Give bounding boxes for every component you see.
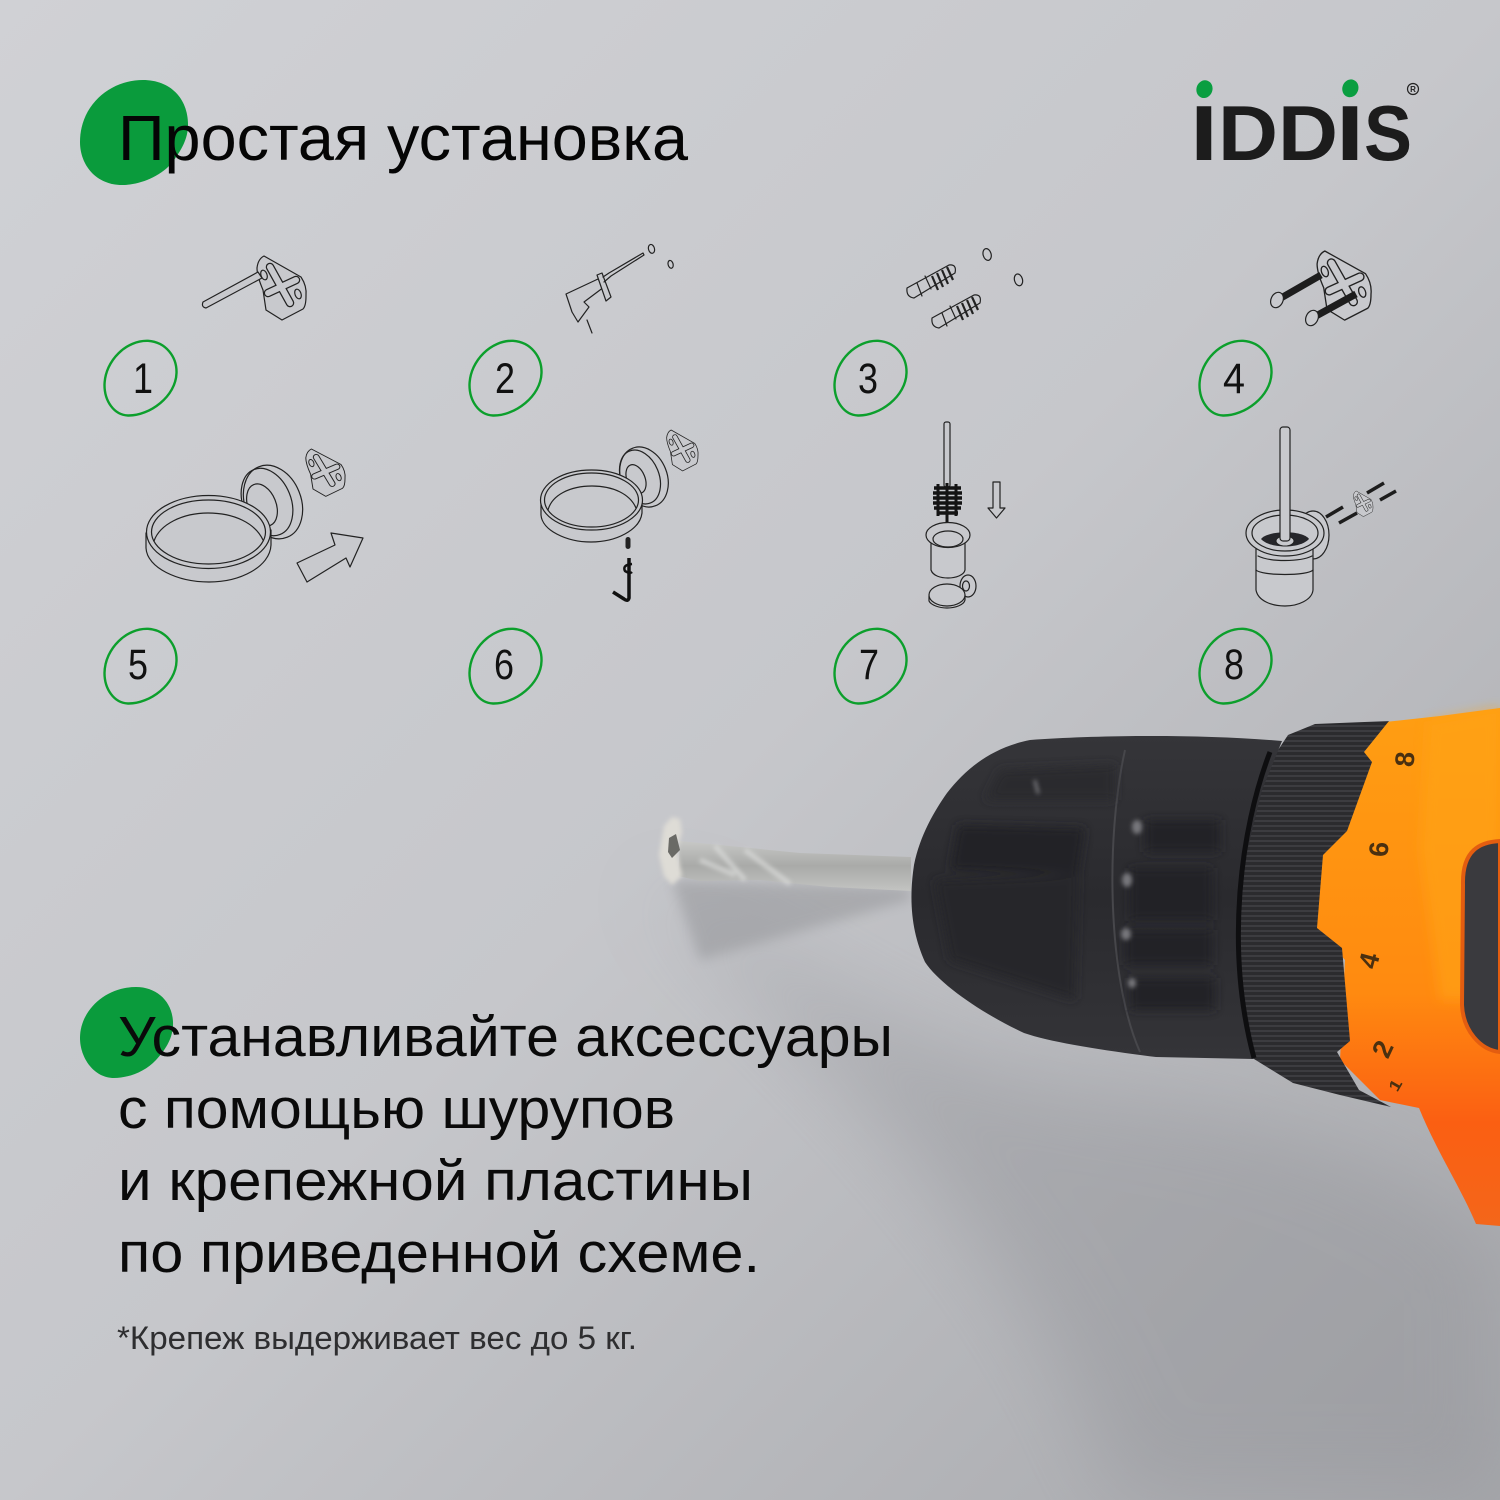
bit shaft	[678, 841, 911, 891]
icon: wall anchors and holes	[907, 248, 1024, 328]
badge 4	[1200, 341, 1272, 416]
badge 5	[104, 629, 177, 704]
title: Простая установка	[118, 102, 688, 174]
registered mark: R	[1410, 85, 1416, 94]
badge 8: 8	[1224, 641, 1244, 689]
bit flutes	[700, 846, 790, 884]
badge 7	[834, 629, 907, 704]
logo letters: D	[1218, 89, 1278, 177]
icon: drill marking holes	[566, 244, 674, 333]
icon: ring fixed with hex key	[540, 430, 698, 600]
main paragraph: и крепежной пластины	[118, 1149, 753, 1213]
logo letters: D	[1278, 89, 1338, 177]
step 6	[470, 430, 698, 704]
step 3	[834, 248, 1024, 416]
main paragraph: по приведенной схеме.	[118, 1221, 760, 1285]
badge 3: 3	[858, 355, 878, 403]
knurled collar	[1235, 721, 1391, 1107]
footnote: *Крепеж выдерживает вес до 5 кг.	[117, 1320, 637, 1356]
dial numbers: 1	[1385, 1076, 1406, 1095]
dial numbers: 8	[1389, 750, 1421, 768]
dial numbers: 6	[1363, 840, 1395, 858]
icon: assembled brush holder with fixings	[1246, 427, 1396, 606]
badge 3	[834, 341, 907, 416]
chuck ribs	[935, 765, 1220, 1010]
dark window	[1462, 841, 1500, 1052]
step 8	[1200, 427, 1396, 704]
badge 1	[104, 341, 177, 416]
badge 2: 2	[495, 355, 515, 403]
collar gap	[1238, 752, 1270, 1058]
logo letters: S	[1364, 89, 1412, 177]
logo letters	[1190, 89, 1412, 177]
drill hole debris	[659, 817, 682, 885]
orange body	[1310, 708, 1500, 1226]
logo letters: I	[1336, 89, 1364, 177]
drill bit in wall	[659, 817, 911, 960]
dial numbers: 4	[1353, 950, 1386, 972]
dial numbers	[1353, 750, 1421, 1095]
main paragraph: с помощью шурупов	[118, 1077, 675, 1141]
badge 6	[470, 629, 542, 704]
green blob behind title	[80, 80, 188, 185]
step 5	[104, 449, 363, 704]
chuck seam	[1112, 750, 1140, 1052]
badge 6: 6	[494, 641, 514, 689]
logo: IDDIS	[1190, 77, 1418, 177]
dial numbers: 2	[1366, 1036, 1400, 1062]
step 4	[1200, 251, 1371, 416]
drill shadow on wall	[640, 880, 1500, 1500]
logo dots	[1194, 77, 1361, 100]
step 1	[104, 256, 306, 416]
badge 5: 5	[128, 641, 148, 689]
green blob behind paragraph	[80, 987, 173, 1078]
chuck highlights	[1033, 780, 1142, 988]
step 7	[834, 422, 1005, 704]
drill	[911, 708, 1500, 1226]
main paragraph	[118, 1005, 893, 1285]
badge 2	[470, 341, 542, 416]
step 2	[470, 244, 674, 416]
lighter highlight band	[1420, 708, 1500, 1000]
icon: soap dish ring mounted on plate	[146, 449, 363, 582]
badge 7: 7	[859, 641, 879, 689]
registered mark	[1408, 84, 1418, 94]
logo letters: I	[1190, 89, 1218, 177]
bit shadow	[672, 880, 910, 960]
badge 1: 1	[133, 355, 153, 403]
icon: toilet brush into holder	[926, 422, 1005, 608]
badge 4: 4	[1223, 355, 1245, 403]
icon: plate with two screws	[1268, 251, 1371, 328]
icon: plate with pin	[202, 256, 306, 320]
main paragraph: Устанавливайте аксессуары	[118, 1005, 893, 1069]
chuck body	[911, 736, 1282, 1059]
badge 8	[1200, 629, 1272, 704]
